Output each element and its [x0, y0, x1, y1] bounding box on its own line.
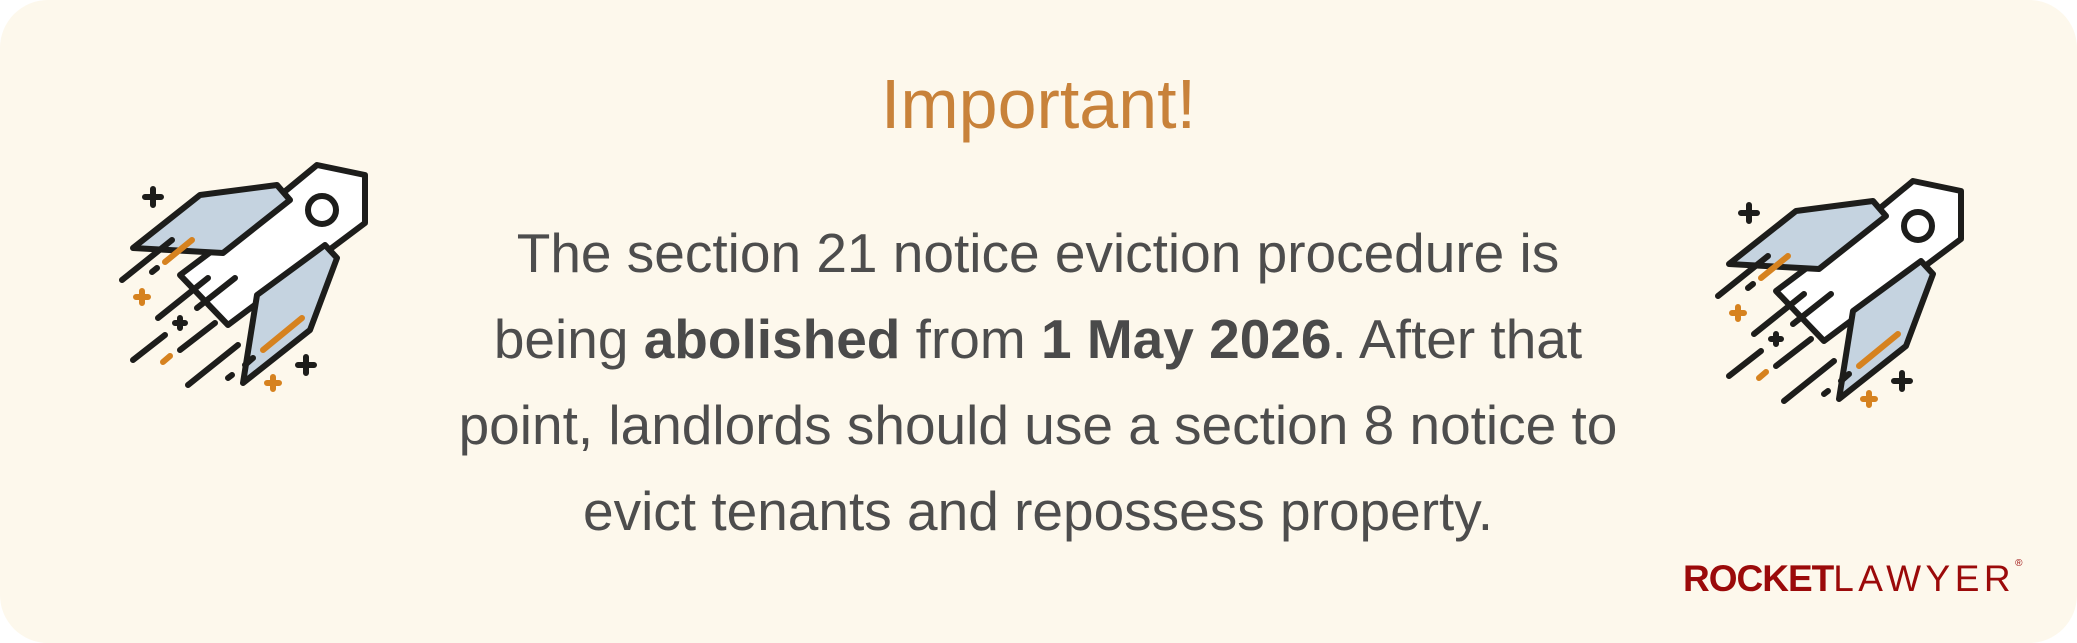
- icon: rocket right: [1715, 178, 1964, 408]
- body text: The section 21 notice eviction procedure is: [517, 222, 1559, 284]
- title: Important!: [881, 65, 1196, 143]
- body text: evict tenants and repossess property.: [583, 480, 1493, 542]
- logo: ROCKETLAWYER®: [1683, 558, 2022, 599]
- body text: point, landlords should use a section 8 notice to: [459, 394, 1617, 456]
- body text: [459, 222, 1617, 542]
- icon: rocket left: [119, 162, 368, 392]
- body text: being abolished from 1 May 2026. After that: [494, 308, 1582, 370]
